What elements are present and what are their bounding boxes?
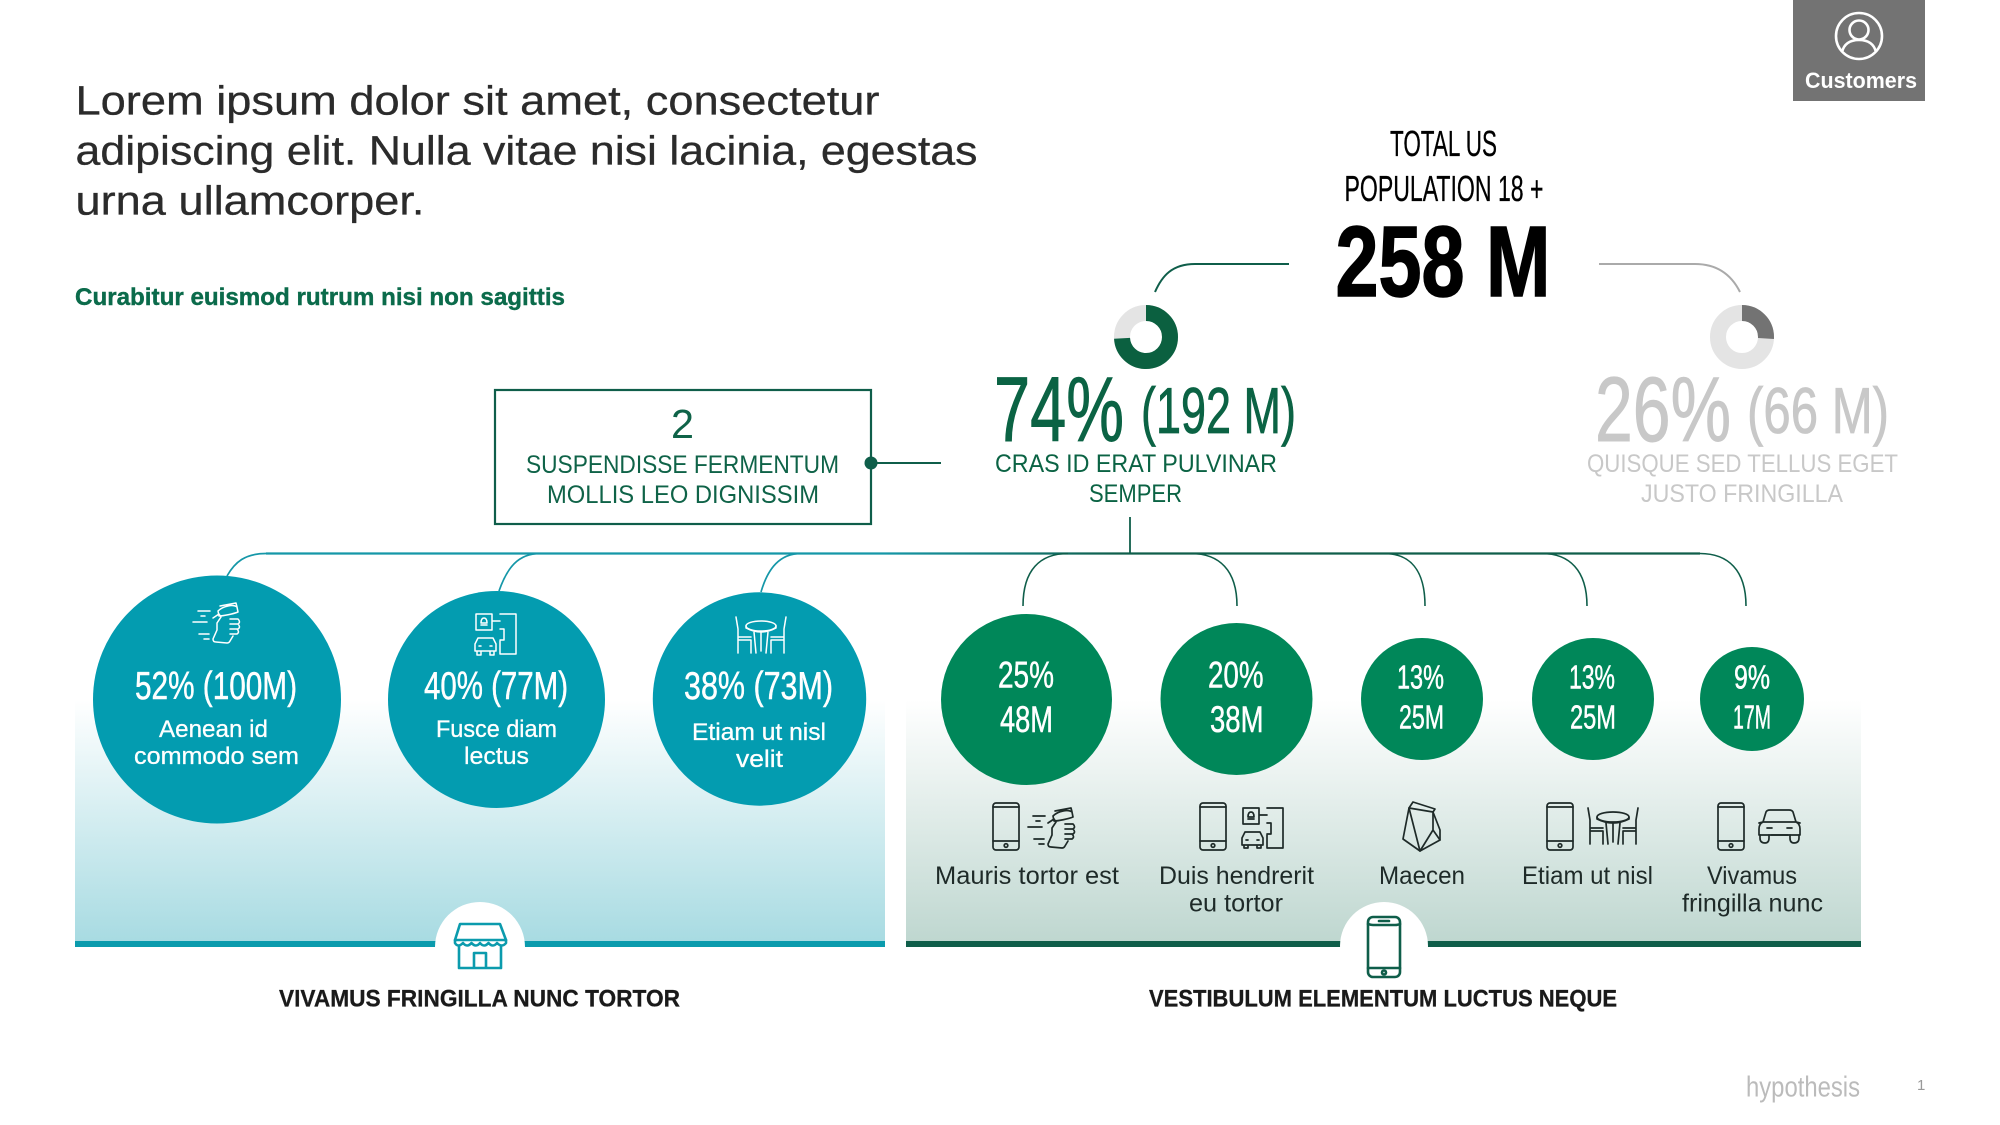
left icon tab (435, 902, 525, 992)
item: vivamus fringilla nunc: fringilla nunc (1682, 890, 1823, 918)
icon: store (455, 924, 506, 968)
bubble: 38% (653, 592, 866, 806)
icon: drive-through (475, 614, 516, 655)
icon: phone and table (1547, 803, 1638, 850)
bubble: 20%: 20% (1208, 654, 1264, 696)
bubble: 13% etiam: 13% (1569, 658, 1615, 696)
item: mauris tortor est (935, 803, 1119, 890)
bubble: 52% (93, 576, 341, 824)
item: duis hendrerit: eu tortor (1189, 890, 1283, 918)
stat: 74%: 74% (994, 359, 1124, 461)
stat: 26%: (66 M) (1747, 374, 1889, 447)
bubble: 40%: 40% (77M) (424, 665, 568, 708)
item: mauris tortor est: Mauris tortor est (935, 862, 1119, 890)
stat: 26% (1587, 359, 1898, 508)
stat: 74% (994, 359, 1296, 508)
bubble: 40% (388, 591, 605, 808)
stat: 26%: 26% (1595, 359, 1731, 461)
item: vivamus fringilla nunc: Vivamus (1707, 862, 1797, 890)
stat: 74%: CRAS ID ERAT PULVINAR (995, 450, 1277, 478)
bubble: 13% maecen (1361, 638, 1483, 760)
bubble: 52%: 52% (100M) (135, 665, 297, 708)
callout box: 2 (671, 401, 694, 447)
bubble: 52%: Aenean id (159, 716, 268, 743)
stat: 74%: (192 M) (1141, 374, 1296, 447)
icon: phone and drive-through (1200, 803, 1283, 850)
left section label: VIVAMUS FRINGILLA NUNC TORTOR (279, 986, 680, 1012)
total population heading: 258 M (1336, 206, 1550, 318)
title: adipiscing elit. Nulla vitae nisi lacinia, egestas (76, 128, 978, 174)
bubble: 40%: lectus (464, 743, 529, 770)
stat: 26%: QUISQUE SED TELLUS EGET (1587, 450, 1898, 478)
brand: hypothesis (1746, 1072, 1860, 1104)
callout box: SUSPENDISSE FERMENTUM (526, 451, 839, 479)
page number: 1 (1917, 1077, 1925, 1094)
panel: right gradient background (906, 700, 1861, 941)
bubble: 9% (1700, 647, 1804, 751)
item: duis hendrerit (1159, 803, 1314, 918)
callout box (495, 390, 871, 524)
icon: table and chairs (736, 617, 786, 653)
icon: phone (1368, 917, 1400, 977)
customers badge: Customers (1805, 68, 1917, 93)
bubble: 13% etiam: 25M (1570, 698, 1616, 736)
total population heading (1336, 123, 1550, 318)
bubble: 52%: commodo sem (134, 743, 299, 770)
title: urna ullamcorper. (76, 178, 424, 224)
callout box: MOLLIS LEO DIGNISSIM (547, 481, 819, 509)
tree connector (227, 517, 1746, 606)
bubble: 20% (1160, 623, 1312, 775)
bubble: 9%: 17M (1733, 698, 1771, 736)
item: etiam ut nisl: Etiam ut nisl (1522, 862, 1653, 890)
bubble: 25%: 25% (998, 654, 1054, 696)
bubble: 13% etiam (1532, 638, 1654, 760)
bubble: 25% (941, 614, 1112, 785)
icon: user (1836, 13, 1882, 59)
total population heading: TOTAL US (1390, 123, 1497, 164)
subtitle: Curabitur euismod rutrum nisi non sagittis (75, 284, 565, 311)
customers badge (1793, 0, 1925, 101)
stat: 26%: JUSTO FRINGILLA (1641, 480, 1843, 508)
icon: phone and car (1718, 803, 1800, 850)
item: duis hendrerit: Duis hendrerit (1159, 862, 1314, 890)
title (76, 78, 978, 224)
icon: bag (1403, 802, 1440, 851)
stat: 74%: SEMPER (1089, 480, 1182, 508)
bubble: 38%: velit (736, 746, 783, 773)
item: maecen (1379, 802, 1465, 890)
item: vivamus fringilla nunc (1682, 803, 1823, 918)
bubble: 13% maecen: 13% (1397, 658, 1444, 696)
item: etiam ut nisl (1522, 803, 1653, 890)
left base bar (75, 941, 885, 947)
bubble: 38%: 38% (73M) (684, 665, 833, 708)
connector: total to 26% (1599, 264, 1740, 292)
icon: phone and hand (993, 803, 1074, 850)
total population heading: POPULATION 18 + (1344, 168, 1544, 209)
bubble: 13% maecen: 25M (1399, 698, 1444, 736)
donut: 74% (1122, 313, 1170, 361)
bubble: 38%: Etiam ut nisl (692, 719, 826, 746)
connector: total to 74% (1155, 264, 1289, 292)
right base bar (906, 941, 1861, 947)
bubble: 9%: 9% (1734, 658, 1770, 696)
bubble: 20%: 38M (1210, 699, 1264, 740)
callout connector (864, 456, 941, 470)
right icon tab (1340, 902, 1428, 990)
bubble: 25%: 48M (1000, 699, 1053, 740)
icon: hand with cup (193, 603, 240, 643)
right section label: VESTIBULUM ELEMENTUM LUCTUS NEQUE (1149, 986, 1617, 1012)
title: Lorem ipsum dolor sit amet, consectetur (76, 78, 879, 124)
item: maecen: Maecen (1379, 862, 1465, 890)
donut: 26% (1718, 313, 1766, 361)
bubble: 40%: Fusce diam (436, 716, 557, 743)
panel: left gradient background (75, 700, 885, 941)
